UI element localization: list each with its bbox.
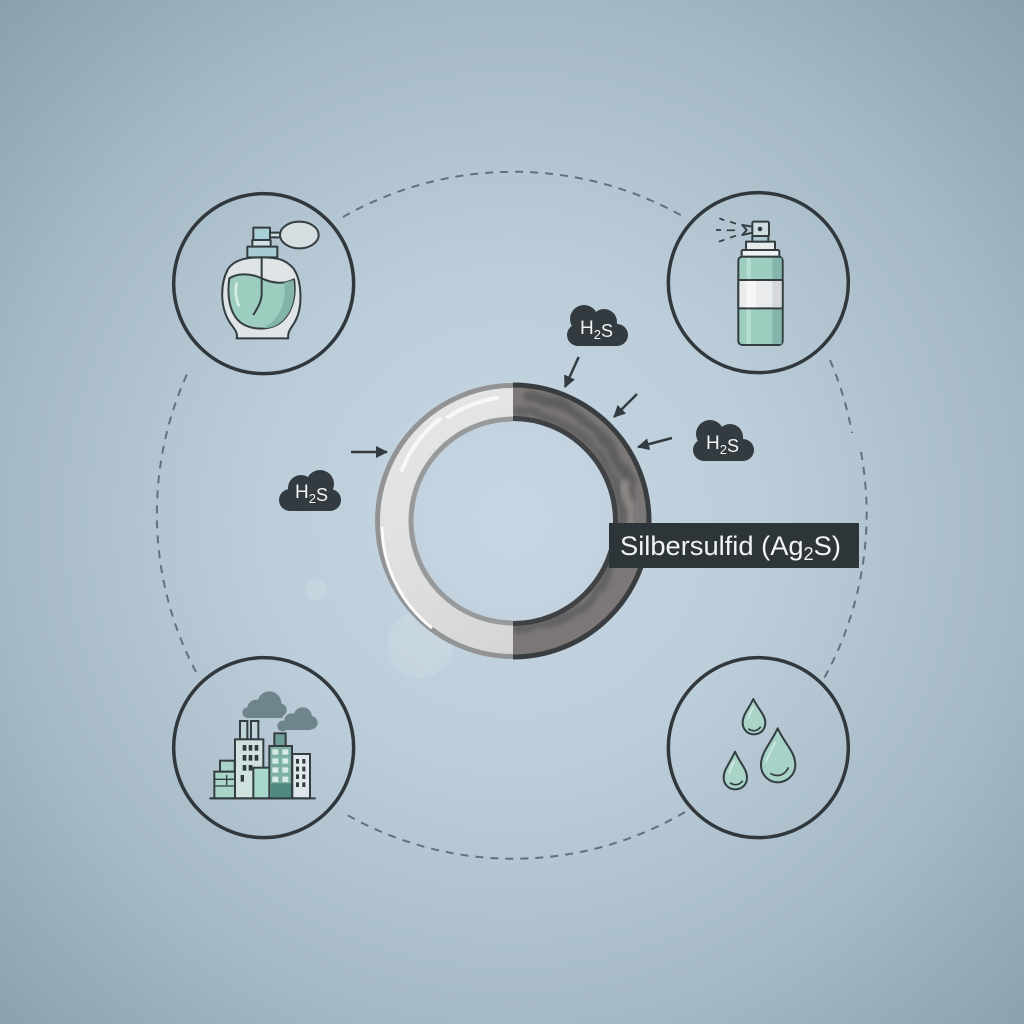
label: Silbersulfid: 2	[804, 544, 814, 564]
H2S cloud left: S	[316, 485, 328, 505]
H2S cloud left	[279, 470, 341, 511]
icon: perfume bottle	[174, 194, 354, 374]
H2S cloud left: 2	[309, 491, 316, 506]
bokeh glow circles	[305, 579, 453, 678]
H2S cloud top: S	[601, 321, 613, 341]
arrows toward ring	[351, 357, 672, 452]
icon: industrial city	[174, 658, 354, 838]
label: Silbersulfid: S)	[814, 531, 841, 561]
smoke clouds	[242, 691, 318, 731]
icon: water drops	[668, 658, 848, 838]
H2S cloud top: H	[580, 318, 594, 339]
tarnished half of ring	[513, 385, 649, 657]
central ring	[378, 385, 649, 657]
H2S cloud left: H	[295, 482, 309, 503]
dashed connecting ring	[157, 172, 867, 859]
H2S cloud right	[693, 420, 754, 461]
H2S cloud top	[567, 305, 628, 346]
H2S cloud right: 2	[720, 442, 727, 457]
H2S cloud right: H	[706, 433, 720, 454]
label: Silbersulfid	[609, 523, 859, 568]
silver half of ring	[378, 386, 513, 656]
label: Silbersulfid: Silbersulfid (Ag	[620, 531, 802, 561]
H2S cloud right: S	[727, 436, 739, 456]
icon: spray can	[668, 193, 848, 373]
H2S cloud top: 2	[594, 327, 601, 342]
